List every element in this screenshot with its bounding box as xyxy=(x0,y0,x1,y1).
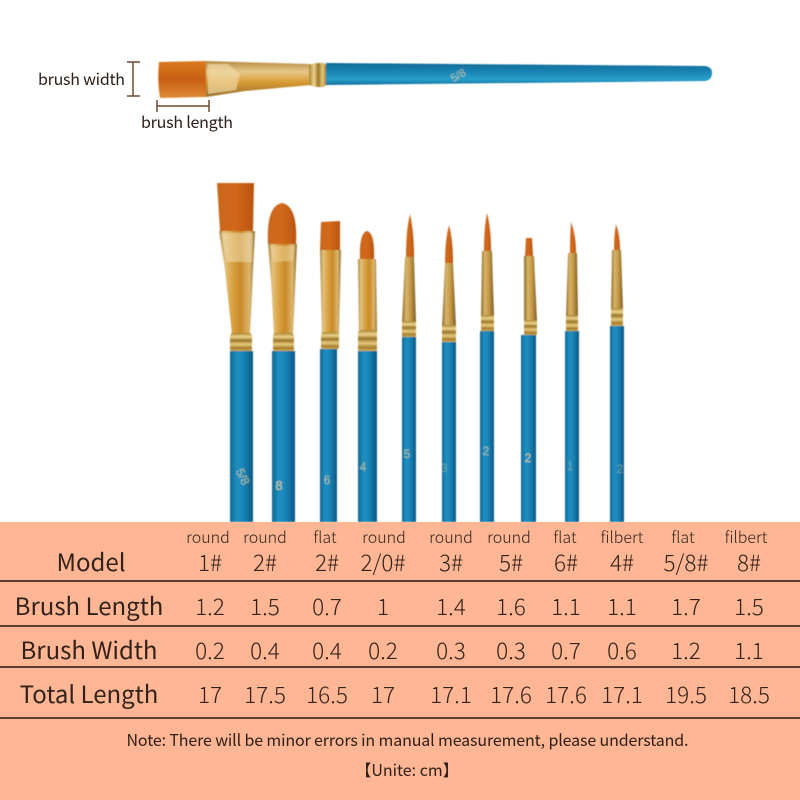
row: total length: 17.5 xyxy=(244,678,286,710)
row: brush width: 0.3 xyxy=(436,634,466,666)
row: brush length xyxy=(15,587,764,622)
handle size mark: 5/8 xyxy=(449,67,468,85)
row: model: 5/8# xyxy=(664,546,708,578)
row: model: 8# xyxy=(737,546,761,578)
row: brush length: Brush Length xyxy=(15,587,163,622)
brush handle xyxy=(326,63,712,85)
dimension: brush length xyxy=(141,100,233,133)
brush 1 round xyxy=(565,222,579,522)
row: model: filbert xyxy=(725,524,768,548)
row: total length: 17.6 xyxy=(490,678,532,710)
row: brush length: 1.5 xyxy=(734,590,764,622)
brush 6 flat: 6 xyxy=(324,473,331,487)
note: Note: There will be minor errors in manual measurement, please understand. xyxy=(126,727,688,751)
row: brush width: 0.2 xyxy=(368,634,398,666)
brush bristles xyxy=(158,61,206,98)
brush 8 filbert: 8 xyxy=(275,478,283,493)
row: model: 2/0# xyxy=(361,546,405,578)
width bracket xyxy=(127,62,140,96)
row: model: round xyxy=(243,524,287,548)
brush 2 round right: 2 xyxy=(617,462,624,476)
row: model: round xyxy=(186,524,230,548)
brush 1 round: 1 xyxy=(567,459,574,473)
row: model: flat xyxy=(553,524,577,548)
row: total length: 17.1 xyxy=(601,678,643,710)
row: model: 5# xyxy=(499,546,523,578)
length label: brush length xyxy=(141,109,233,133)
row: brush width: Brush Width xyxy=(20,631,158,666)
row: model: 3# xyxy=(439,546,463,578)
row: brush length: 1.2 xyxy=(195,590,225,622)
row: total length: 19.5 xyxy=(665,678,707,710)
row: brush length: 1.7 xyxy=(671,590,701,622)
row: model xyxy=(56,524,768,578)
row: model: 2# xyxy=(315,546,339,578)
brush 5/8 flat xyxy=(217,183,255,522)
row: brush length: 1.4 xyxy=(436,590,466,622)
brush 4 filbert: 4 xyxy=(360,460,367,474)
ferrule highlight xyxy=(208,64,240,94)
row: brush width: 0.7 xyxy=(551,634,581,666)
row: brush length: 0.7 xyxy=(312,590,342,622)
row: total length: 17.6 xyxy=(545,678,587,710)
row: model: round xyxy=(487,524,531,548)
row: brush length: 1.1 xyxy=(607,590,637,622)
row: total length: 18.5 xyxy=(728,678,770,710)
table panel xyxy=(0,522,800,800)
row: total length xyxy=(20,675,770,710)
row: model: 1# xyxy=(198,546,222,578)
brush ferrule xyxy=(206,61,311,97)
row: total length: 17 xyxy=(198,678,222,710)
row: brush width: 0.2 xyxy=(195,634,225,666)
brush 5 round xyxy=(402,214,416,522)
row: brush length: 1.6 xyxy=(496,590,526,622)
row: model: round xyxy=(429,524,473,548)
row: brush length: 1.5 xyxy=(250,590,280,622)
row: model: 6# xyxy=(554,546,578,578)
row: total length: 17.1 xyxy=(430,678,472,710)
brush 3 round xyxy=(441,225,456,522)
row: total length: 16.5 xyxy=(306,678,348,710)
brush 2 flat xyxy=(521,238,537,522)
brush 2 round: 2 xyxy=(483,444,490,458)
brush 5/8 flat: 5/8 xyxy=(233,466,253,488)
row: brush width: 0.4 xyxy=(250,634,280,666)
labelled sample brush xyxy=(158,61,712,98)
row: brush width: 0.4 xyxy=(312,634,342,666)
row: brush width: 1.1 xyxy=(734,634,764,666)
row: model: 4# xyxy=(610,546,634,578)
row: model: filbert xyxy=(601,524,644,548)
row: model: Model xyxy=(56,543,126,578)
row: total length: Total Length xyxy=(20,675,158,710)
row: total length: 17 xyxy=(371,678,395,710)
brush 3 round: 3 xyxy=(441,461,448,475)
brush 6 flat xyxy=(320,221,341,522)
row: brush width: 0.6 xyxy=(607,634,637,666)
row: model: round xyxy=(362,524,406,548)
brush 8 filbert xyxy=(268,203,297,522)
brush set xyxy=(217,183,624,522)
row: brush width: 1.2 xyxy=(671,634,701,666)
unit: 【Unite: cm】 xyxy=(355,757,459,781)
brush 2 flat: 2 xyxy=(525,451,532,465)
brush 5 round: 5 xyxy=(404,447,411,461)
row: brush length: 1.1 xyxy=(551,590,581,622)
row: brush width xyxy=(20,631,764,666)
brush 2 round right xyxy=(610,224,624,522)
row: model: 2# xyxy=(253,546,277,578)
brush 2 round xyxy=(480,213,494,522)
length bracket xyxy=(157,100,209,112)
row dividers xyxy=(0,581,800,718)
brush 4 filbert xyxy=(358,231,377,522)
row: brush length: 1 xyxy=(377,590,389,622)
dimension: brush width xyxy=(38,62,140,96)
width label: brush width xyxy=(38,66,125,90)
row: model: flat xyxy=(313,524,337,548)
row: brush width: 0.3 xyxy=(496,634,526,666)
row: model: flat xyxy=(671,524,695,548)
brush crimp xyxy=(309,63,326,87)
